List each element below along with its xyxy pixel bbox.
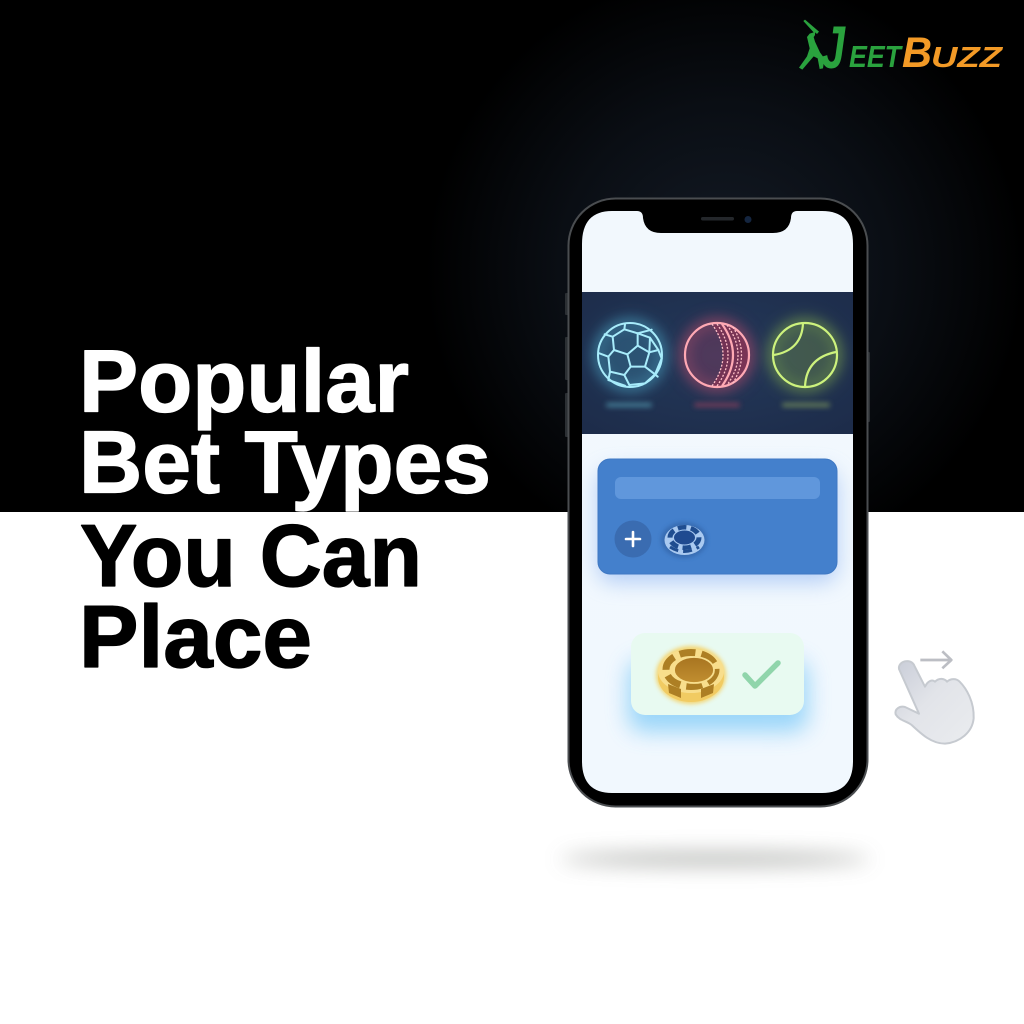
icon: neon soccer ball — [593, 318, 667, 392]
phone — [565, 198, 870, 806]
blue card shadow — [598, 470, 837, 582]
input bar — [615, 477, 820, 499]
panel: confirmation card — [631, 633, 804, 715]
icon: neon tennis ball — [768, 318, 842, 392]
phone ground shadow — [560, 852, 870, 866]
title: Popular Bet Types You Can Place: Bet Types — [79, 412, 491, 512]
logo wordmark: EET — [849, 39, 904, 74]
logo wordmark: B — [902, 29, 932, 77]
phone side buttons — [565, 293, 870, 437]
logo wordmark: UZZ — [931, 42, 1004, 74]
icon: swipe hand — [895, 651, 974, 744]
speaker — [701, 217, 734, 220]
ball reflections — [606, 403, 830, 407]
panel: blue bet card — [598, 459, 837, 574]
green card glow — [628, 660, 808, 732]
logo wordmark: J — [821, 14, 846, 81]
icon: gold poker chip — [656, 646, 726, 704]
icon: blue poker chip — [661, 522, 707, 558]
title: Popular Bet Types You Can Place: You Can — [80, 506, 422, 605]
icon: neon cricket ball — [680, 318, 754, 392]
title: Popular Bet Types You Can Place: Popular — [79, 332, 409, 430]
phone screen — [582, 211, 853, 793]
phone body — [568, 198, 868, 806]
icon: plus button — [614, 520, 652, 558]
swipe arrow — [920, 651, 951, 668]
title: Popular Bet Types You Can Place — [79, 332, 491, 686]
title: Popular Bet Types You Can Place: Place — [79, 587, 312, 686]
panel: sports balls band — [582, 292, 853, 434]
camera — [744, 216, 752, 223]
icon: cricket player in logo — [799, 20, 824, 70]
logo: JeetBuzz — [799, 14, 1004, 81]
phone notch details — [701, 216, 752, 223]
hand — [895, 661, 974, 744]
icon: check mark — [745, 663, 778, 686]
